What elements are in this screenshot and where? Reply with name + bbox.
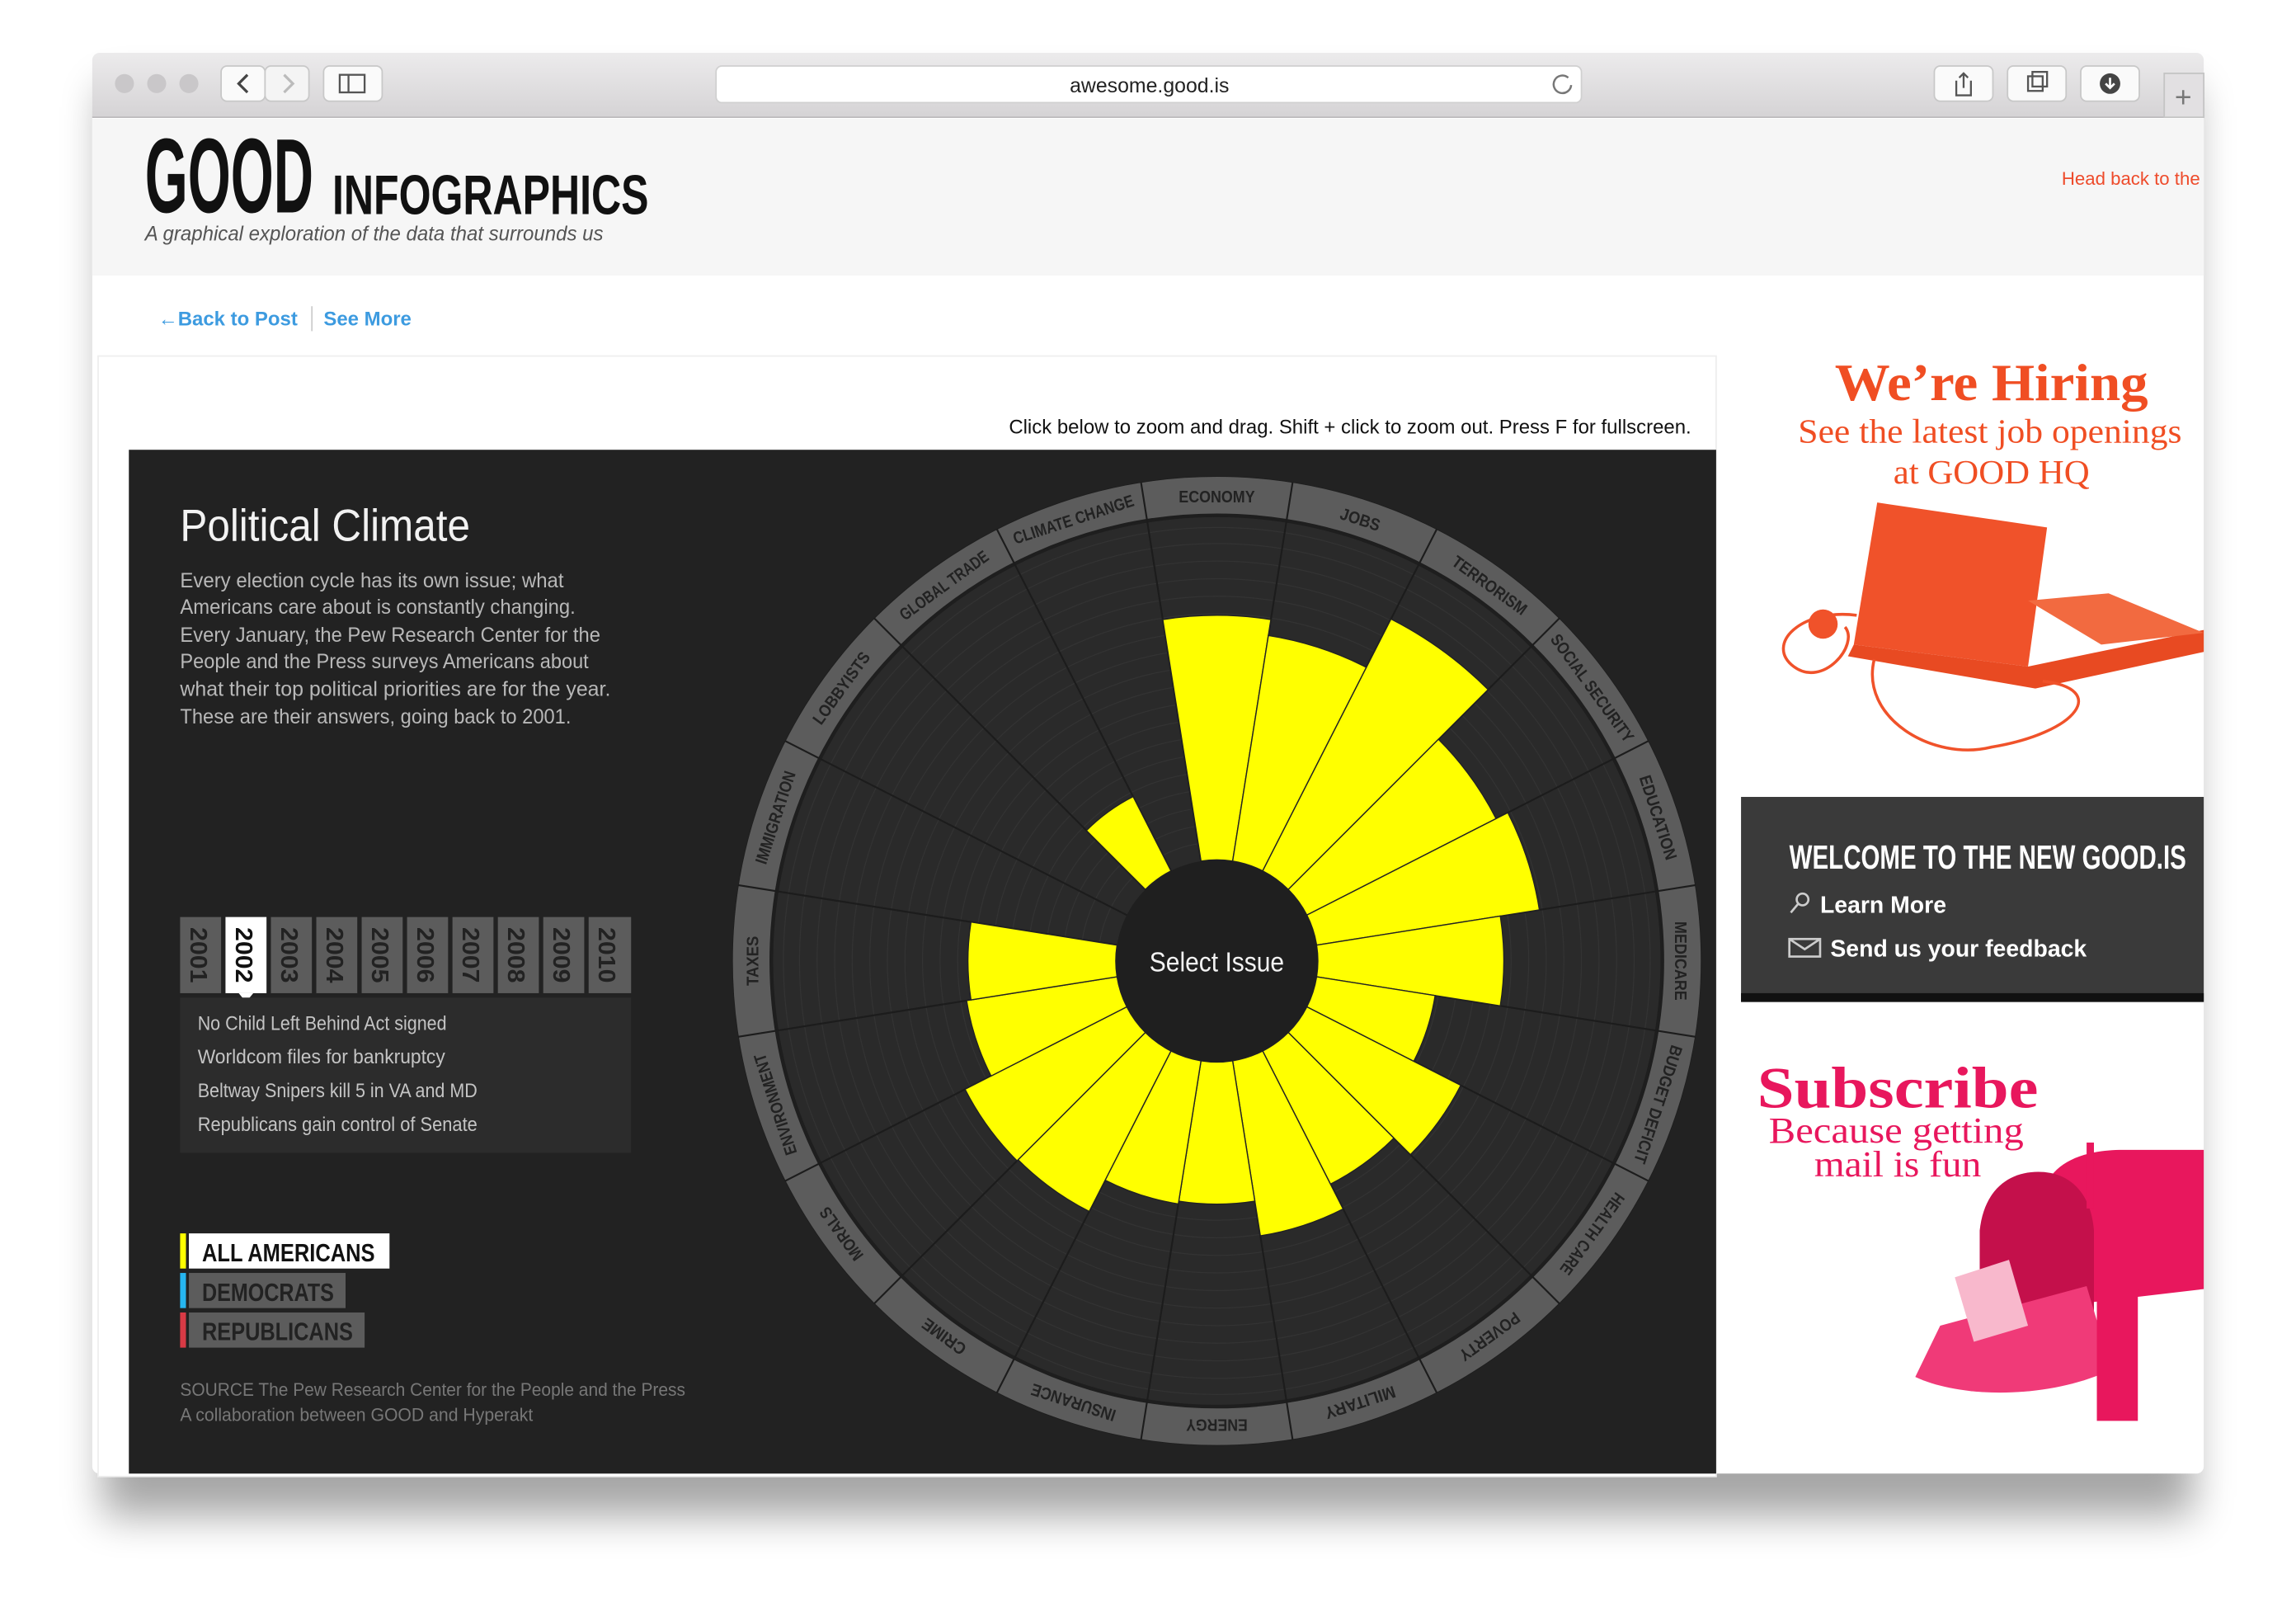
sidebar: subscribe ad [1757,1056,2204,1421]
description: Every election cycle has its own issue; what [180,570,564,592]
sidebar: welcome box [1741,797,2204,1002]
source [180,1379,685,1425]
browser toolbar: + [2175,81,2192,114]
ring labels: HEALTH CARE [1556,1189,1627,1278]
logo INFOGRAPHICS: INFOGRAPHICS [332,164,649,226]
events box [180,997,631,1152]
events box: Republicans gain control of Senate [198,1114,478,1136]
year tabs: 2005 [366,927,393,983]
description: Every January, the Pew Research Center for the [180,624,600,647]
radial chart [732,476,1701,1446]
sidebar: subscribe ad: mail is fun [1814,1143,1981,1185]
events box: Worldcom files for bankruptcy [198,1046,445,1068]
wedges [962,615,1543,1239]
description [179,570,610,728]
icon: envelope [1790,939,1820,957]
source: SOURCE The Pew Research Center for the People and the Press [180,1379,685,1400]
description: what their top political priorities are for the year. [179,679,610,701]
year tabs: 2006 [412,927,438,983]
sidebar: hiring ad: We’re Hiring [1835,353,2148,412]
icon: laptop [1783,502,2204,750]
ring labels: BUDGET DEFICIT [1630,1043,1685,1166]
source: A collaboration between GOOD and Hyperakt [180,1404,533,1425]
events box: Beltway Snipers kill 5 in VA and MD [198,1080,478,1102]
legend: REPUBLICANS [202,1319,353,1346]
year tabs: 2004 [321,927,347,983]
ring labels: INSURANCE [1029,1379,1118,1424]
head back link: Head back to the [2062,168,2200,189]
header [92,118,2204,276]
ring labels: ENERGY [1186,1416,1248,1434]
sidebar: subscribe ad: Subscribe [1757,1056,2039,1120]
content box [98,356,1716,1477]
events box: No Child Left Behind Act signed [198,1012,447,1034]
browser toolbar [92,53,2204,117]
ring labels: ENVIRONMENT [751,1051,801,1157]
ring labels: GLOBAL TRADE [896,548,992,624]
legend: ALL AMERICANS [202,1240,375,1267]
ring labels: POVERTY [1455,1308,1523,1364]
tagline: A graphical exploration of the data that surrounds us [144,223,604,245]
ring labels: TAXES [745,936,763,986]
sidebar: hiring ad: See the latest job openings [1798,412,2182,450]
ring labels: ECONOMY [1179,488,1255,507]
year tabs [180,917,631,1002]
sidebar: welcome box: Send us your feedback [1830,936,2087,963]
sidebar: welcome box: Learn More [1820,892,1946,918]
ring labels: SOCIAL SECURITY [1546,631,1637,747]
ring labels: MORALS [816,1203,868,1264]
panel: dark infographic [129,450,1716,1473]
description: These are their answers, going back to 2001. [180,706,571,728]
sidebar: hiring ad: at GOOD HQ [1894,454,2090,491]
ring labels [745,488,1689,1434]
browser toolbar: awesome.good.is [1070,75,1229,97]
ring labels: MEDICARE [1671,921,1689,1001]
year tabs: 2001 [185,927,211,983]
center circle: Select Issue [1150,946,1284,978]
year tabs: 2002 [230,927,256,983]
year tabs: 2009 [548,927,574,983]
nav links [158,306,412,331]
ring labels: CRIME [919,1314,970,1358]
ring labels: CLIMATE CHANGE [1011,492,1136,549]
description: Americans care about is constantly changing. [180,596,576,619]
center circle [1116,860,1318,1062]
legend: DEMOCRATS [202,1279,334,1307]
sidebar: hiring ad [1783,353,2204,750]
ring labels: JOBS [1338,505,1382,535]
description: People and the Press surveys Americans about [180,651,589,673]
year tabs: 2003 [275,927,302,983]
nav links: ←Back to Post [158,308,298,330]
ring labels: IMMIGRATION [753,769,800,866]
year tabs: 2007 [457,927,483,983]
year tabs: 2010 [593,927,619,983]
title: Political Climate [180,499,470,550]
logo GOOD: GOOD [145,118,313,236]
ring labels: LOBBYISTS [810,649,874,728]
icon: key [1790,893,1809,912]
nav links: See More [323,308,412,330]
legend [180,1233,389,1348]
ring labels: MILITARY [1322,1382,1398,1421]
instructions: Click below to zoom and drag. Shift + click to zoom out. Press F for fullscreen. [1009,417,1691,439]
icon: mailbox [1915,1143,2204,1421]
year tabs: 2008 [502,927,529,983]
sidebar: subscribe ad: Because getting [1769,1110,2024,1151]
ring labels: EDUCATION [1635,773,1680,862]
ring labels: TERRORISM [1448,553,1530,620]
